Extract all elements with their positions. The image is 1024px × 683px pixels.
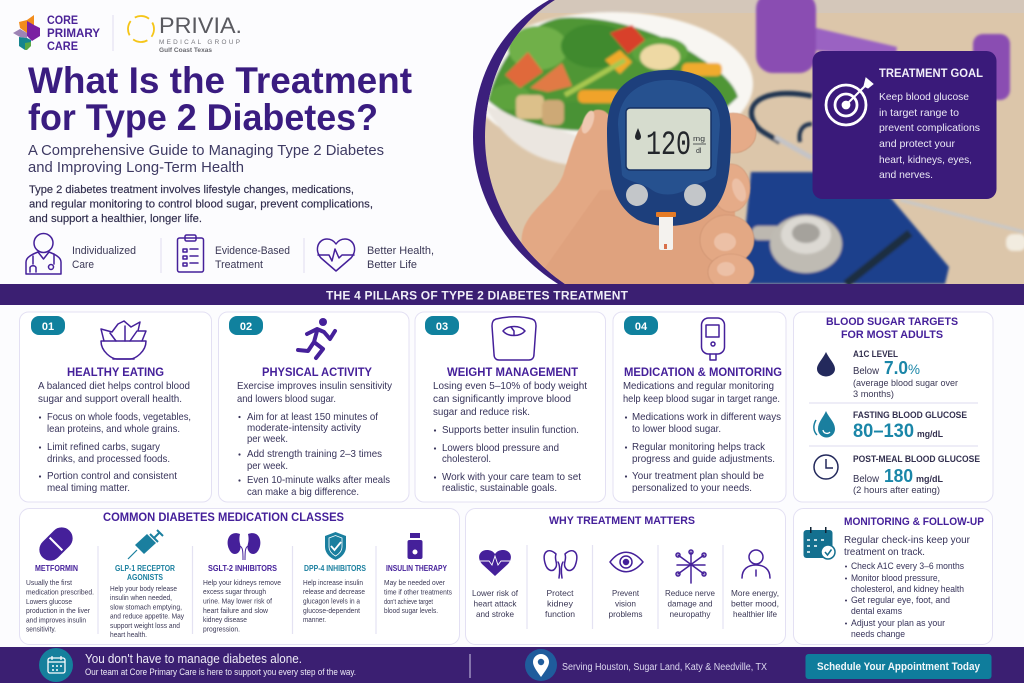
target: A1C: (average blood sugar over (853, 378, 958, 389)
icon: shield (325, 532, 346, 560)
text: healthy eating (38, 381, 191, 494)
label: better health better life: Better Health, (367, 245, 434, 257)
text: physical activity: Even 10-minute walks after meals (247, 475, 390, 486)
label: individualized care: Care (72, 259, 94, 271)
logo: Core Primary Care: CARE (47, 39, 78, 53)
icon: syringe (128, 530, 163, 559)
bullets: monitoring: cholesterol, and kidney health (851, 584, 964, 594)
heading: WEIGHT MANAGEMENT (447, 367, 578, 379)
benefit: nerve: damage and (668, 598, 713, 608)
DPP-4 column: glucose-dependent (303, 606, 361, 615)
target: A1C (853, 348, 958, 400)
SGLT-2 column: excess sugar through (203, 587, 266, 596)
text: weight management: Supports better insulin function. (442, 425, 579, 436)
hand (521, 109, 756, 290)
text: weight management: Work with your care team to set (442, 472, 581, 483)
bullets: monitoring: Get regular eye, foot, and (851, 595, 950, 605)
intro paragraph: and support a healthier, longer life. (29, 213, 202, 225)
text: weight management: realistic, sustainable goals. (442, 483, 557, 494)
GLP-1 column: Help your body release (110, 584, 177, 593)
subtitle (28, 142, 384, 176)
text: monitoring: Regular check-ins keep your (844, 535, 971, 546)
icon: location pin (525, 649, 557, 681)
text: weight management: Losing even 5–10% of body weight (433, 381, 587, 392)
target: post-meal glucose (853, 453, 980, 496)
label: individualized care (72, 245, 136, 271)
panel: medication and monitoring (613, 312, 786, 502)
DPP-4 column: release and decrease (303, 587, 365, 596)
badge 04: 04 (635, 321, 648, 333)
logo: Privia Medical Group: Gulf Coast Texas (159, 47, 212, 54)
icon: heart pulse (317, 239, 355, 271)
GLP-1 column: slow stomach emptying, (110, 602, 182, 612)
metformin column: Usually the first (26, 578, 73, 587)
text: physical activity: per week. (247, 461, 288, 472)
intro paragraph: and regular monitoring to control blood sugar, prevent complications, (29, 198, 373, 210)
icon: clipboard (178, 235, 204, 272)
heading: COMMON DIABETES MEDICATION CLASSES (103, 512, 344, 524)
dumbbell (814, 26, 898, 52)
benefit: energy: healthier life (733, 609, 777, 619)
text: physical activity: Add strength training 2–3 times (247, 449, 382, 460)
text: weight management: can significantly improve blood (433, 394, 571, 405)
SGLT-2 column: SGLT-2 INHIBITORS (208, 564, 278, 573)
benefit: heart: and stroke (476, 609, 514, 619)
bullets: monitoring: needs change (851, 629, 905, 639)
DPP-4 column: glucagon levels in a (303, 596, 361, 606)
target: post-meal glucose: (2 hours after eating) (853, 485, 940, 496)
benefit: kidney: kidney (547, 598, 574, 608)
icon: pill (35, 523, 77, 565)
badge 02 (229, 316, 263, 335)
title: What Is the Treatment (28, 60, 412, 101)
logo: Privia Medical Group: PRIVIA. (159, 13, 242, 38)
text: medication and monitoring: help keep blood sugar in target range. (623, 394, 780, 405)
logo: Core Primary Care: PRIMARY (47, 26, 100, 40)
hero photo: dl (696, 148, 702, 155)
badge 02: 02 (240, 321, 252, 333)
text: healthy eating: Focus on whole foods, vegetables, (47, 412, 191, 423)
SGLT-2 column: heart failure and slow (203, 606, 268, 615)
benefit: energy: More energy, (731, 588, 779, 598)
badge 01: 01 (42, 321, 54, 333)
benefit: energy: better mood, (731, 598, 779, 608)
target: fasting glucose: FASTING BLOOD GLUCOSE (853, 409, 967, 420)
callout text: prevent complications (879, 122, 980, 134)
callout text: in target range to (879, 107, 959, 119)
label: better health better life (367, 245, 434, 271)
logo: Core Primary Care: CORE (47, 13, 78, 27)
stethoscope head (752, 226, 782, 240)
target: A1C: 3 months) (853, 389, 894, 400)
target: post-meal glucose: Below (853, 474, 880, 485)
GLP-1 column (110, 530, 184, 639)
heading: MONITORING & FOLLOW-UP (844, 516, 984, 528)
GLP-1 column: insulin when needed, (110, 593, 172, 602)
text: physical activity: Exercise improves insulin sensitivity (237, 381, 393, 392)
GLP-1 column: AGONISTS (127, 573, 164, 582)
panel: monitoring and follow-up (794, 508, 992, 644)
label: individualized care: Individualized (72, 245, 136, 257)
metformin column: medication prescribed. (26, 588, 94, 596)
text: medication and monitoring: Regular monitoring helps track (632, 442, 766, 453)
badge 04 (624, 316, 658, 335)
SGLT-2 column: Help your kidneys remove (203, 578, 281, 587)
text: healthy eating: Limit refined carbs, sugary (47, 442, 161, 453)
SGLT-2 column: kidney disease (203, 615, 247, 624)
callout text: and protect your (879, 138, 955, 150)
heading: WHY TREATMENT MATTERS (549, 515, 695, 527)
text: healthy eating: lean proteins, and whole grains. (47, 424, 180, 435)
label: better health better life: Better Life (367, 259, 417, 271)
target: post-meal glucose: POST-MEAL BLOOD GLUCOSE (853, 453, 980, 464)
text: weight management (433, 381, 587, 494)
DPP-4 column (303, 532, 367, 624)
benefit: heart: Lower risk of (472, 588, 519, 598)
SGLT-2 column: progression. (203, 624, 240, 634)
SGLT-2 column: urine. May lower risk of (203, 596, 273, 606)
label: evidence-based treatment (215, 245, 290, 271)
footer message (85, 651, 356, 677)
badge 03: 03 (436, 321, 448, 333)
benefit: kidney (544, 551, 577, 619)
benefit: kidney: function (545, 609, 575, 619)
subtitle: A Comprehensive Guide to Managing Type 2 Diabetes (28, 142, 384, 159)
subtitle: and Improving Long-Term Health (28, 159, 244, 176)
footer bar (0, 647, 1024, 683)
target: A1C: A1C LEVEL (853, 348, 898, 359)
panel: blood sugar targets (794, 312, 993, 502)
notebook (740, 172, 949, 284)
target: fasting glucose: mg/dL (917, 429, 943, 440)
benefit: eye: problems (608, 609, 642, 619)
text: medication and monitoring: Medications work in different ways (632, 412, 781, 423)
section band: the 4 pillars: THE 4 PILLARS OF TYPE 2 DIABETES TREATMENT (326, 288, 629, 302)
metformin column: Lowers glucose (26, 597, 72, 606)
benefit: nerve: neuropathy (670, 609, 711, 619)
benefit: energy (731, 550, 779, 619)
footer message: You don't have to manage diabetes alone. (85, 651, 302, 666)
bowl (486, 10, 754, 136)
text: healthy eating: drinks, and processed foods. (47, 454, 170, 465)
footer message: Our team at Core Primary Care is here to support you every step of the way. (85, 666, 356, 677)
text: healthy eating: Portion control and consistent (47, 471, 177, 482)
stethoscope tube (752, 93, 812, 142)
icon: clock (814, 455, 838, 479)
target: fasting glucose (853, 409, 967, 442)
metformin column (26, 523, 94, 634)
icon: vial (408, 533, 422, 559)
text: healthy eating: meal timing matter. (47, 483, 130, 494)
badge 01 (31, 316, 65, 335)
insulin column: blood sugar levels. (384, 606, 438, 615)
heading (826, 316, 958, 341)
text: healthy eating: A balanced diet helps control blood (38, 381, 190, 392)
text: physical activity: per week. (247, 434, 288, 445)
logo: Privia Medical Group: MEDICAL GROUP (159, 39, 240, 46)
benefit: nerve (665, 550, 715, 619)
GLP-1 column: support weight loss and (110, 621, 180, 630)
insulin column: time if other treatments (384, 588, 452, 596)
icon: meter (702, 318, 724, 360)
icon: calendar (39, 648, 73, 682)
text: monitoring (844, 535, 971, 558)
icon: kidneys (228, 533, 260, 560)
icon: target (826, 78, 873, 125)
target: A1C: Below (853, 366, 880, 377)
callout text: heart, kidneys, eyes, (879, 154, 972, 166)
icon: runner (298, 318, 335, 358)
icon: salad bowl (101, 321, 146, 359)
text: physical activity: can make a big difference. (247, 487, 359, 498)
glucose meter (607, 70, 731, 226)
text: physical activity: and lowers blood sugar. (237, 394, 336, 405)
insulin column: don't achieve target (384, 597, 434, 606)
DPP-4 column: Help increase insulin (303, 578, 363, 587)
button: schedule appointment (806, 654, 992, 679)
heading: HEALTHY EATING (67, 367, 164, 379)
bullets: monitoring: dental exams (851, 606, 902, 616)
heading: FOR MOST ADULTS (841, 329, 943, 341)
benefit: heart: heart attack (474, 598, 517, 608)
heading: MEDICATION & MONITORING (624, 367, 782, 379)
metformin column: and improves insulin (26, 616, 86, 624)
benefit: heart (472, 550, 519, 619)
icon: drop (817, 352, 835, 376)
title (28, 60, 412, 138)
section band: the 4 pillars (0, 284, 1024, 305)
text: medication and monitoring (623, 381, 781, 494)
bullets: monitoring: Adjust your plan as your (851, 618, 945, 628)
text: medication and monitoring: progress and guide adjustments. (632, 454, 775, 465)
service area: Serving Houston, Sugar Land, Katy & Needville, TX (562, 662, 767, 673)
badge 03 (425, 316, 459, 335)
callout text: and nerves. (879, 169, 933, 181)
heading: PHYSICAL ACTIVITY (262, 367, 372, 379)
panel: why treatment matters (466, 508, 786, 644)
callout text: TREATMENT GOAL (879, 66, 983, 80)
text: physical activity: moderate-intensity activity (247, 423, 362, 434)
benefit: kidney: Protect (546, 588, 574, 598)
text: medication and monitoring: personalized to your needs. (632, 483, 752, 494)
callout: treatment goal (812, 51, 996, 199)
metformin column: METFORMIN (35, 564, 78, 573)
text: medication and monitoring: Medications and regular monitoring (623, 381, 774, 392)
callout text (879, 66, 983, 181)
text: monitoring: treatment on track. (844, 547, 925, 558)
logo: Privia Medical Group (123, 11, 242, 54)
insulin column: INSULIN THERAPY (386, 564, 448, 573)
panel: common diabetes medication classes (20, 508, 460, 644)
benefit: eye: Prevent (612, 588, 640, 598)
text: medication and monitoring: to lower blood sugar. (632, 424, 721, 435)
pen (846, 233, 910, 284)
label: evidence-based treatment: Treatment (215, 259, 263, 271)
panel: healthy eating (20, 312, 212, 502)
bullets: monitoring (845, 561, 964, 639)
metformin column: sensitivity. (26, 624, 56, 634)
benefit: eye (608, 552, 643, 619)
text: weight management: sugar and reduce risk. (433, 407, 530, 418)
target: A1C: % (908, 361, 920, 377)
insulin column: May be needed over (384, 578, 445, 587)
text: medication and monitoring: Your treatment plan should be (632, 471, 764, 482)
panel: weight management (415, 312, 606, 502)
benefit: nerve: Reduce nerve (665, 588, 715, 598)
insulin column (384, 533, 452, 615)
GLP-1 column: heart health. (110, 630, 147, 639)
panel: physical activity (218, 312, 409, 502)
button: schedule appointment: Schedule Your Appointment Today (817, 661, 980, 673)
intro paragraph (29, 184, 373, 225)
text: weight management: cholesterol. (442, 454, 491, 465)
GLP-1 column: and reduce appetite. May (110, 612, 184, 620)
icon: teal drop (814, 411, 835, 438)
test strip (659, 215, 673, 250)
SGLT-2 column (203, 533, 281, 634)
bullets: monitoring: Check A1C every 3–6 months (851, 561, 964, 571)
icon: care provider (26, 234, 61, 274)
callout text: Keep blood glucose (879, 91, 969, 103)
text: healthy eating: sugar and support overall health. (38, 394, 182, 405)
text: physical activity: Aim for at least 150 minutes of (247, 412, 378, 423)
hero photo: 120 (646, 127, 691, 165)
title: for Type 2 Diabetes? (28, 97, 378, 138)
GLP-1 column: GLP-1 RECEPTOR (115, 564, 175, 573)
DPP-4 column: manner. (303, 615, 326, 624)
metformin column: production in the liver (26, 606, 90, 615)
text: weight management: Lowers blood pressure and (442, 443, 559, 454)
hero photo (471, 0, 1024, 290)
salad (488, 17, 738, 132)
logo: Core Primary Care (13, 13, 100, 53)
DPP-4 column: DPP-4 INHIBITORS (304, 564, 367, 573)
benefit: eye: vision (615, 598, 636, 608)
target: A1C: 7.0 (884, 358, 908, 378)
target: fasting glucose: 80–130 (853, 421, 914, 442)
bullets: monitoring: Monitor blood pressure, (851, 573, 940, 583)
text: physical activity (237, 381, 393, 498)
target: post-meal glucose: mg/dL (916, 474, 943, 485)
intro paragraph: Type 2 diabetes treatment involves lifestyle changes, medications, (29, 184, 354, 196)
icon: scale (492, 317, 536, 360)
icon: calendar check (804, 527, 835, 559)
heading: BLOOD SUGAR TARGETS (826, 316, 958, 328)
hero photo: mg (693, 136, 705, 143)
target: post-meal glucose: 180 (884, 466, 913, 486)
label: evidence-based treatment: Evidence-Based (215, 245, 290, 257)
